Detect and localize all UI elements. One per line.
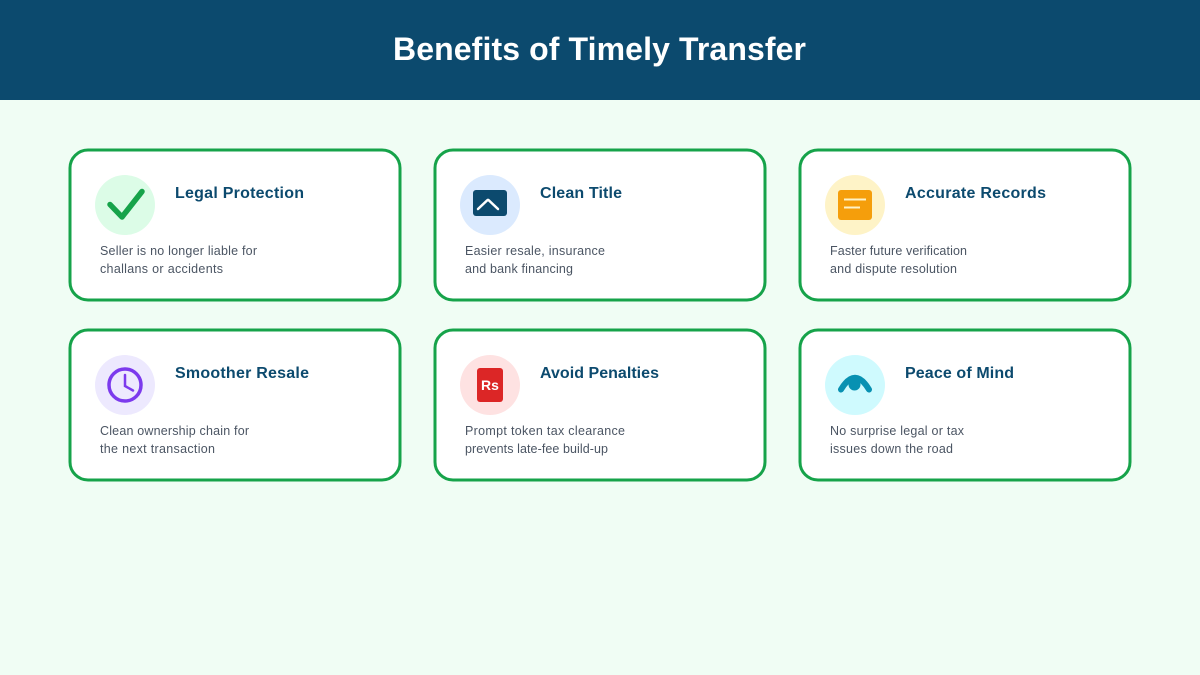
text: Peace of Mind description [830,424,965,456]
text: Legal Protection description [100,244,257,276]
icon: title card [460,175,520,235]
icon: rupee note [460,355,520,415]
text: Peace of Mind description: issues down the road [830,442,953,456]
icon: document [825,175,885,235]
heading: Legal Protection: Legal Protection [175,185,304,202]
text: Smoother Resale description [100,424,249,456]
panel: Smoother Resale [70,330,400,480]
text: Accurate Records description [830,244,967,276]
text: Clean Title description: Easier resale, insurance [465,244,605,258]
heading: Avoid Penalties: Avoid Penalties [540,365,659,382]
panel: Legal Protection [70,150,400,300]
text: Smoother Resale description: Clean ownership chain for [100,424,249,438]
text: Avoid Penalties description: Prompt token tax clearance [465,424,625,438]
text: Clean Title description: and bank financing [465,262,573,276]
panel: Clean Title [435,150,765,300]
text: Legal Protection description: challans or accidents [100,262,223,276]
icon: check mark [95,175,155,235]
text: Accurate Records description: Faster future verification [830,244,967,258]
heading: Peace of Mind: Peace of Mind [905,365,1014,382]
icon: calm eye [825,355,885,415]
panel: Avoid Penalties [435,330,765,480]
panel: Peace of Mind [800,330,1130,480]
heading: Smoother Resale: Smoother Resale [175,365,309,382]
text: Smoother Resale description: the next transaction [100,442,215,456]
header band [0,0,1200,100]
panel: Accurate Records [800,150,1130,300]
heading: Accurate Records: Accurate Records [905,185,1046,202]
text: Clean Title description [465,244,605,276]
text: Avoid Penalties description [465,424,625,456]
icon: rupee note: Rs [481,377,499,393]
title: Benefits of Timely Transfer [393,31,806,67]
text: Peace of Mind description: No surprise legal or tax [830,424,965,438]
text: Avoid Penalties description: prevents late-fee build-up [465,442,608,456]
text: Legal Protection description: Seller is no longer liable for [100,244,257,258]
icon: clock [95,355,155,415]
heading: Clean Title: Clean Title [540,185,622,202]
text: Accurate Records description: and dispute resolution [830,262,957,276]
